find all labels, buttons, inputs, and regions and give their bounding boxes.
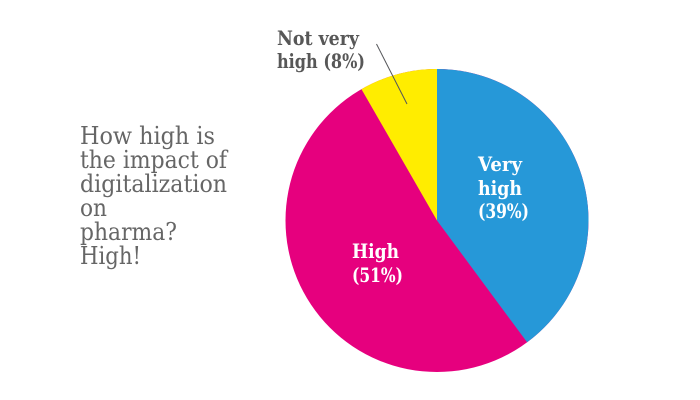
slice: very high 39% [437,69,589,342]
title: How high is [80,122,215,150]
pie chart [286,69,589,372]
title: pharma? [80,218,177,246]
label: high [352,240,403,287]
label: high: High [352,240,399,263]
label: very high: (39%) [478,200,529,223]
leader line [376,44,407,104]
title: the impact of [80,146,229,174]
title: on [80,194,107,222]
label: high: (51%) [352,264,403,287]
title: High! [80,242,141,270]
slice: high 51% [286,69,588,372]
label: not very high: high (8%) [277,50,365,73]
label: very high: Very [477,153,523,176]
label: not very high [277,27,365,73]
title [80,122,229,270]
label: very high: high [478,177,522,200]
label: very high [477,153,529,223]
slice: not very high 8% [362,69,437,220]
label: not very high: Not very [277,27,360,50]
title: digitalization [80,170,227,198]
